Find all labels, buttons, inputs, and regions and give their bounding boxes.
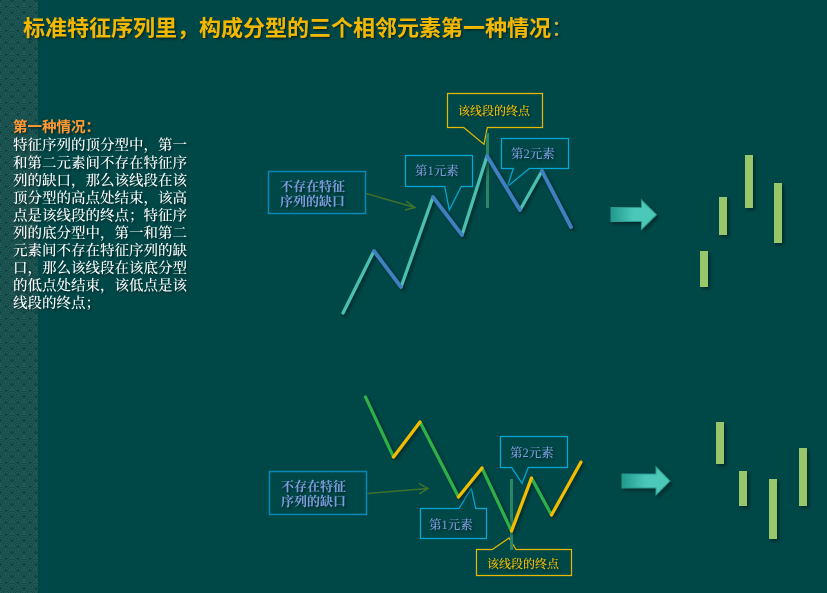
callout: segment end: 该线段的终点	[487, 556, 560, 571]
callout: segment end: 该线段的终点	[458, 103, 531, 118]
callout: no gap: 不存在特征	[281, 479, 346, 494]
body text: 顶分型的高点处结束，该高	[13, 189, 187, 207]
bars: top feature sequence	[700, 155, 782, 287]
left patterned strip	[0, 0, 38, 593]
callout: no gap	[268, 172, 366, 214]
callout: no gap: 序列的缺口	[281, 494, 346, 509]
callout: element 2: 第2元素	[511, 146, 555, 161]
zigzag strokes	[343, 156, 571, 313]
title: ：	[551, 16, 573, 41]
callout: element 1: 第1元素	[429, 517, 473, 532]
body text: 元素间不存在特征序列的缺	[13, 242, 187, 260]
body text: 列的底分型中，第一和第二	[13, 224, 187, 242]
end point marker line	[510, 479, 513, 550]
callout: element 2	[500, 436, 568, 483]
callout: segment end	[476, 538, 572, 576]
heading: first case: 第一种情况：	[13, 118, 100, 136]
zigzag strokes	[366, 397, 581, 531]
body text: 特征序列的顶分型中，第一	[13, 136, 187, 154]
body text	[13, 136, 187, 312]
body text: 点是该线段的终点；特征序	[13, 206, 187, 224]
body text: 口，那么该线段在该底分型	[13, 259, 187, 277]
bars: bottom feature sequence	[716, 422, 807, 539]
callout: element 1	[420, 488, 486, 538]
body text: 列的缺口，那么该线段在该	[13, 172, 187, 190]
text block: explanation	[13, 118, 187, 312]
chart: top fractal line segment	[268, 94, 571, 313]
callout: element 2	[502, 138, 568, 187]
title: 标准特征序列里，构成分型的三个相邻元素第一种情况	[23, 16, 551, 41]
end point marker line	[486, 133, 489, 208]
arrow: top result	[611, 200, 656, 230]
callout: element 2: 第2元素	[510, 445, 554, 460]
callout: element 1: 第1元素	[415, 163, 459, 178]
callout: no gap: 序列的缺口	[280, 194, 345, 209]
arrow: no gap pointer	[366, 194, 415, 210]
body text: 线段的终点；	[13, 294, 100, 312]
chart: bottom fractal line segment	[270, 397, 581, 576]
callout: element 1	[406, 156, 472, 210]
body text: 的低点处结束，该低点是该	[13, 276, 187, 294]
body text: 和第二元素间不存在特征序	[13, 154, 187, 172]
arrow: no gap pointer	[368, 484, 428, 494]
arrow: bottom result	[622, 467, 670, 495]
callout: no gap	[270, 472, 366, 514]
callout: no gap: 不存在特征	[280, 179, 345, 194]
callout: segment end	[448, 94, 542, 144]
